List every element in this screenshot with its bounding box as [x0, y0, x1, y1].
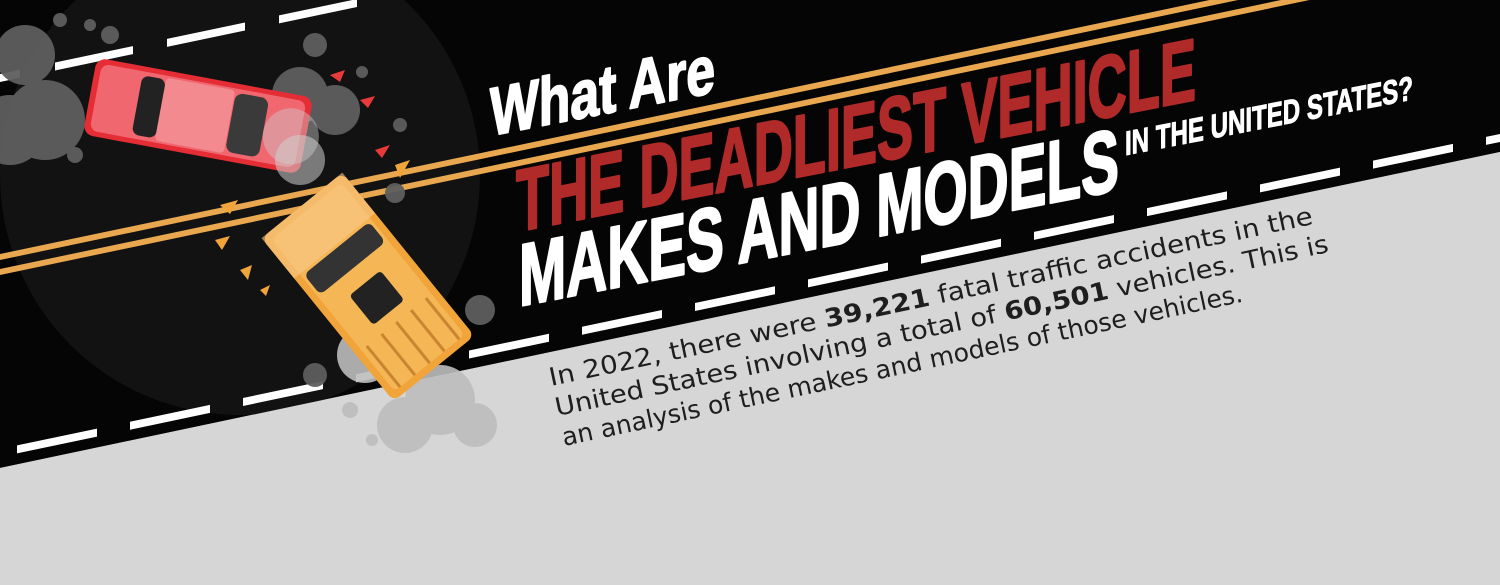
orange truck — [262, 173, 474, 401]
smoke clouds — [0, 13, 495, 387]
title line 1: What Are — [490, 31, 715, 151]
intro paragraph: In 2022, there were 39,221 fatal traffic accidents in the — [546, 201, 1315, 392]
red car — [83, 58, 326, 177]
intro paragraph: United States involving a total of 60,501 vehicles. This is — [552, 229, 1331, 422]
road band — [0, 0, 1500, 468]
intro paragraph: an analysis of the makes and models of those vehicles. — [559, 279, 1245, 452]
upper dashes — [0, 0, 357, 94]
gold center lines — [0, 0, 1500, 271]
debris — [215, 70, 410, 296]
title line 3: MAKES AND MODELS — [519, 110, 1119, 325]
lower dashes — [17, 120, 1500, 453]
dark vignette circle — [0, 0, 480, 415]
title — [490, 0, 1413, 331]
